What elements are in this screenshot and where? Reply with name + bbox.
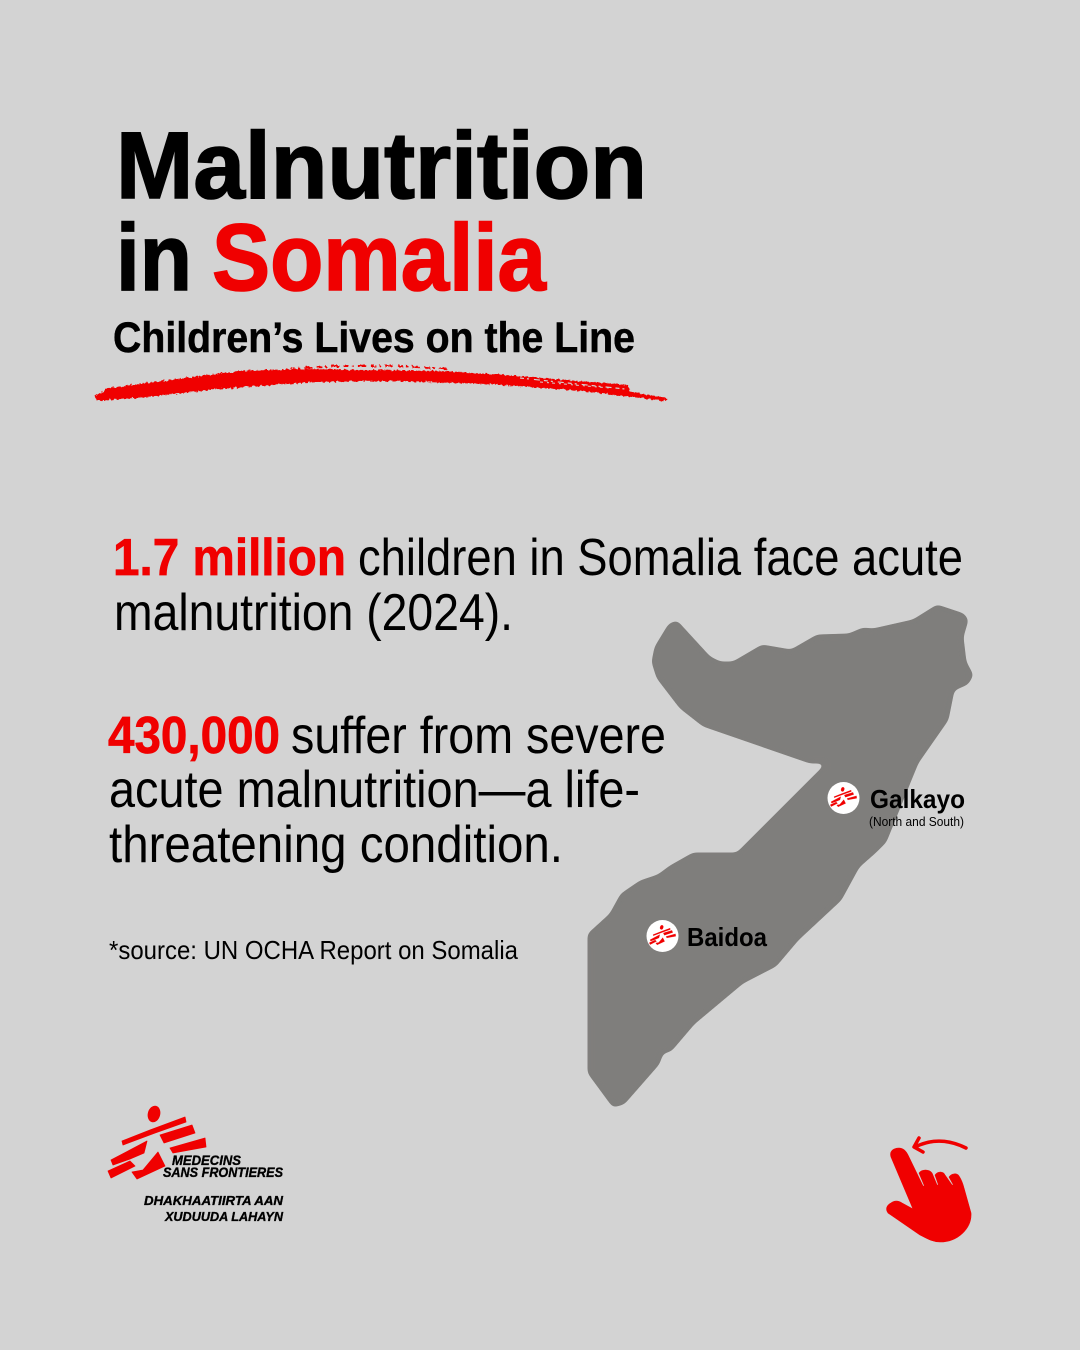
swipe arrow xyxy=(914,1138,966,1152)
subtitle: Children’s Lives on the Line xyxy=(113,314,635,362)
marker: Baidoa xyxy=(646,920,767,952)
icon: swipe hand xyxy=(887,1138,971,1242)
logo Somali tagline: XUDUUDA LAHAYN xyxy=(164,1209,284,1224)
statistic: 1.7 million: malnutrition (2024). xyxy=(114,584,513,642)
statistic: 1.7 million: 1.7 million xyxy=(113,529,346,587)
map of Somalia xyxy=(588,605,973,1107)
statistic: 430,000: acute malnutrition—a life- xyxy=(109,761,640,819)
title: in xyxy=(116,205,192,311)
label: Galkayo: Galkayo xyxy=(870,784,965,814)
MSF logo xyxy=(108,1105,284,1224)
statistic: 1.7 million xyxy=(113,529,963,642)
logo wordmark: MEDECINS xyxy=(172,1153,241,1168)
logo Somali tagline: DHAKHAATIIRTA AAN xyxy=(144,1193,284,1208)
title xyxy=(116,113,647,311)
logo wordmark: SANS FRONTIERES xyxy=(163,1165,283,1180)
logo wordmark xyxy=(163,1153,283,1180)
icon: MSF marker xyxy=(646,920,678,952)
brush underline xyxy=(95,366,667,401)
source note: *source: UN OCHA Report on Somalia xyxy=(109,935,518,965)
statistic: 430,000: suffer from severe xyxy=(291,707,666,765)
icon: MSF running figure xyxy=(108,1105,206,1179)
label: Baidoa: Baidoa xyxy=(687,922,767,952)
statistic: 430,000: threatening condition. xyxy=(109,816,563,874)
icon: MSF marker xyxy=(828,782,860,814)
statistic: 430,000: 430,000 xyxy=(108,707,280,765)
logo Somali tagline xyxy=(144,1193,284,1224)
hand xyxy=(887,1148,971,1242)
title: Malnutrition xyxy=(116,113,647,219)
marker: Galkayo xyxy=(828,782,965,829)
statistic: 1.7 million: children in Somalia face acute xyxy=(358,529,963,587)
label: North and South: (North and South) xyxy=(869,815,964,829)
statistic: 430,000 xyxy=(108,707,666,874)
title: Somalia xyxy=(212,205,547,311)
